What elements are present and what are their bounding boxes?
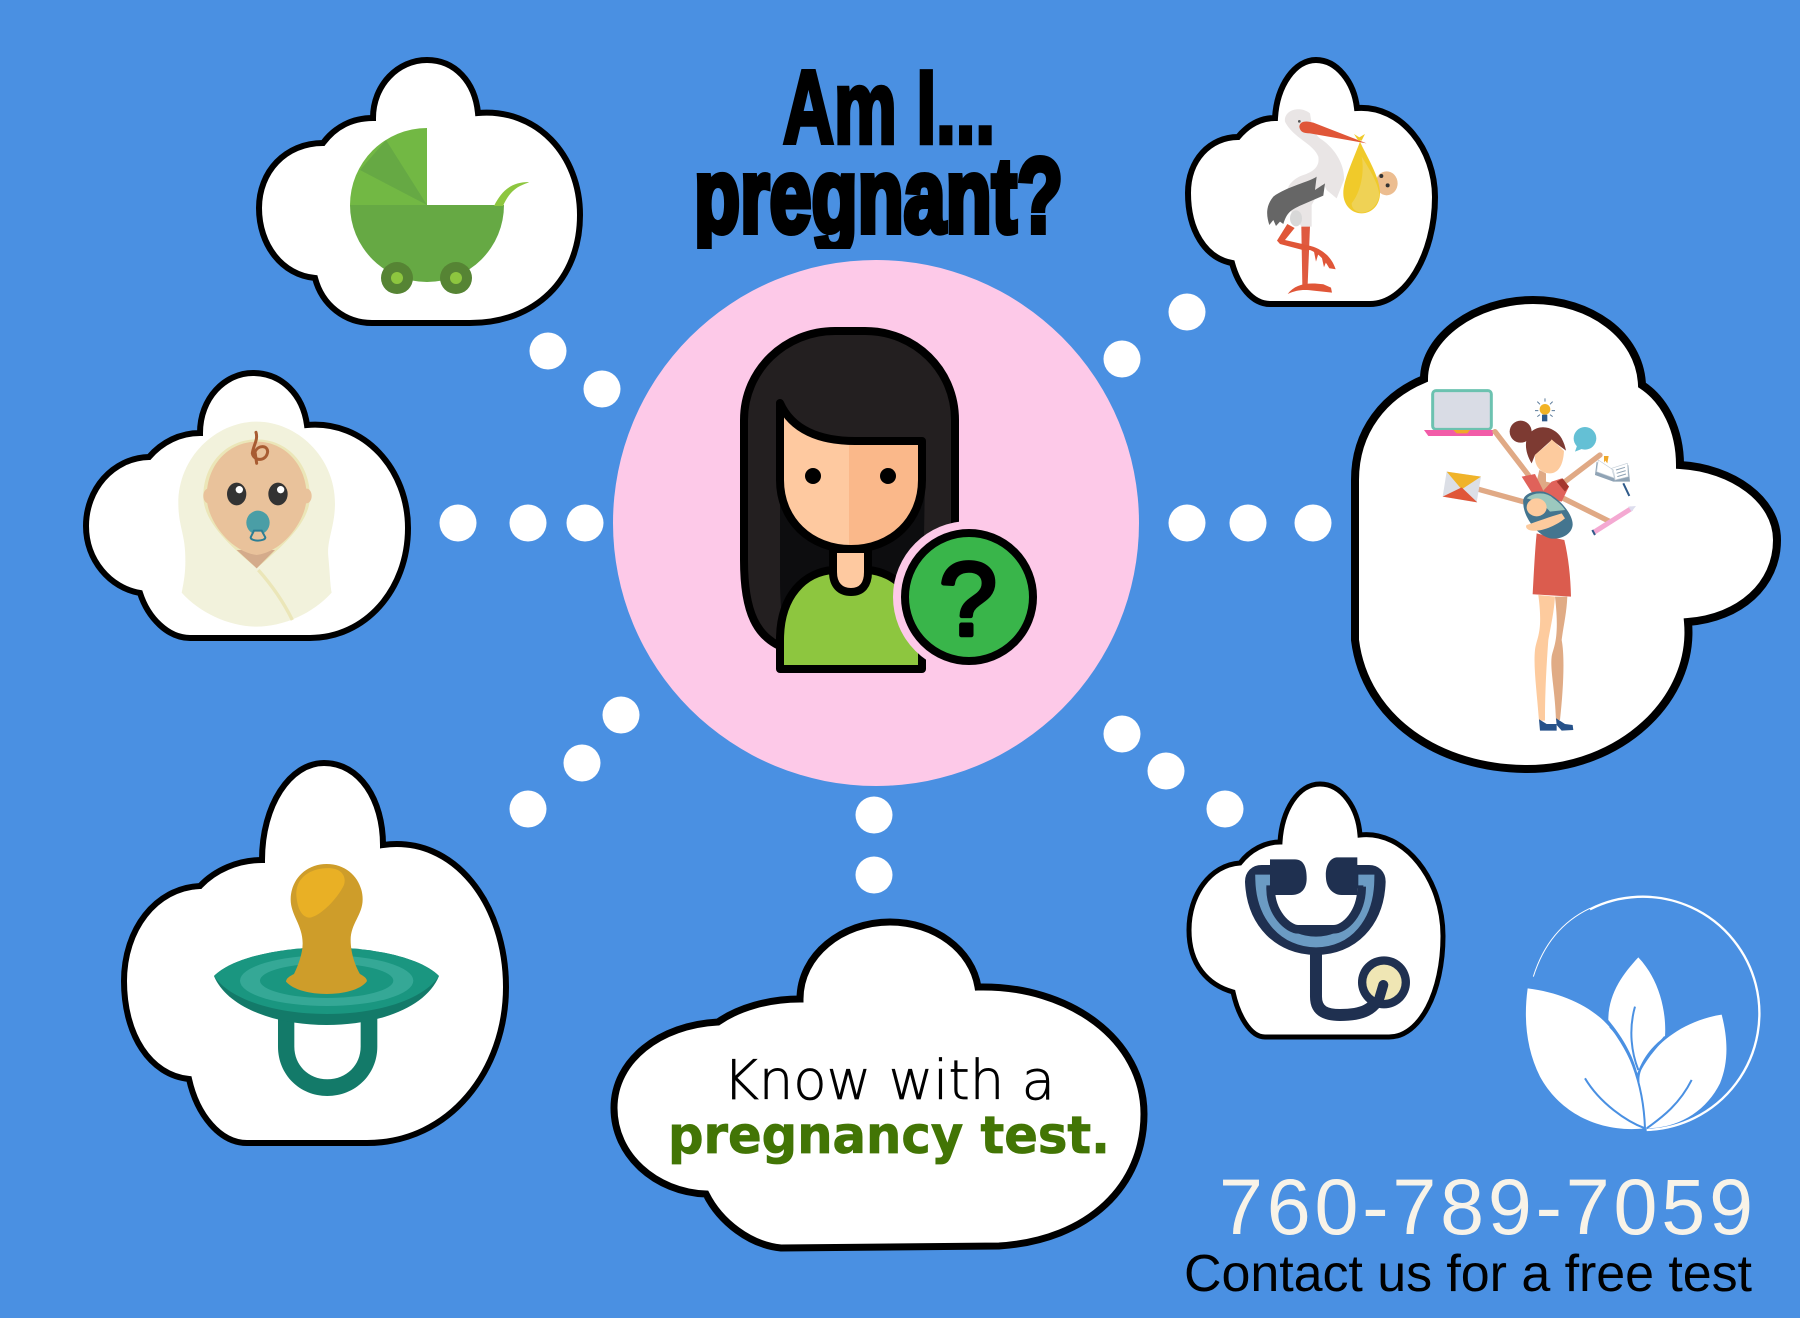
icon: question mark badge — [893, 521, 1045, 673]
icon: stork carrying baby — [1267, 109, 1398, 294]
panel: baby cloud — [86, 373, 408, 638]
icon: swaddled baby — [178, 422, 335, 627]
panel: multitasking mother cloud — [1355, 300, 1777, 769]
text: know with a: Know with a — [723, 1049, 1055, 1112]
title: pregnant? — [694, 137, 1063, 255]
icon: mother juggling baby and tasks — [1424, 391, 1636, 731]
text: pregnancy test: pregnancy test. — [668, 1106, 1110, 1166]
panel: stork cloud — [1188, 60, 1435, 304]
panel: pacifier cloud — [124, 763, 506, 1143]
panel: pregnancy test cloud — [614, 922, 1144, 1248]
contact line: Contact us for a free test — [1184, 1245, 1753, 1303]
title: Am I... — [783, 50, 995, 166]
icon: woman with long black hair — [744, 331, 955, 669]
title — [696, 69, 1061, 249]
connector dots — [440, 294, 1332, 894]
panel: stethoscope cloud — [1189, 784, 1443, 1037]
logo: white leaves in circle — [1526, 897, 1759, 1130]
panel: stroller cloud — [259, 60, 580, 323]
icon: stethoscope — [1257, 857, 1410, 1015]
icon: question mark badge: ? — [939, 542, 997, 658]
panel: central pink circle with woman — [613, 260, 1139, 786]
icon: pacifier — [214, 864, 439, 1096]
phone number: 760-789-7059 — [1219, 1162, 1753, 1251]
icon: baby stroller — [350, 128, 529, 294]
